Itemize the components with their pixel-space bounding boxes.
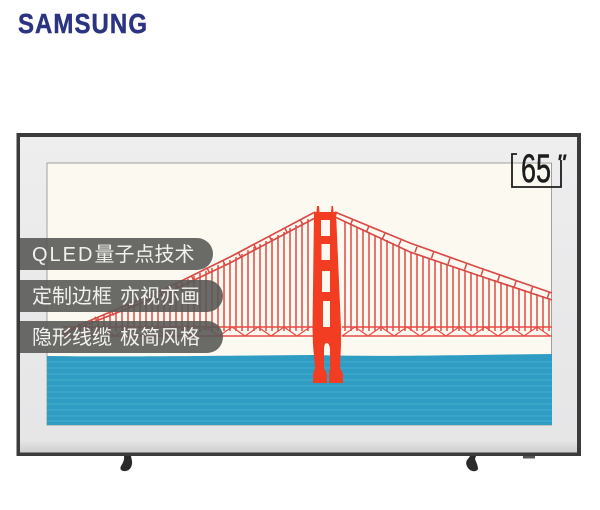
feature pills [20,238,223,353]
icon: right stand foot [466,456,478,471]
artwork: golden gate bridge [47,163,552,425]
bridge tower [312,206,343,383]
badge: 65 inch [512,147,567,191]
tv frame [16,133,581,456]
pill: QLED: QLED量子点技术 [32,243,194,266]
main cables right [335,212,552,300]
pill: custom frame [20,280,223,312]
size number: 65 [521,147,551,191]
white mat [20,137,577,452]
pill: invisible cable: 隐形线缆 极简风格 [32,326,200,349]
main cables left [63,212,315,334]
bracket [512,154,561,187]
inch mark: " [556,150,567,175]
logo: SAMSUNG: SAMSUNG [18,10,147,39]
television [16,133,581,471]
pill: custom frame: 定制边框 亦视亦画 [32,285,200,308]
road deck [63,327,552,336]
deck truss [63,327,550,336]
cable struts [63,214,552,333]
water [47,354,552,425]
pill: invisible cable [20,321,223,353]
art background [47,163,552,425]
pill: QLED [20,238,213,270]
bridge structure [63,212,552,336]
icon: left stand foot [120,456,132,471]
icon: remote sensor bump [523,456,535,458]
hangers [68,219,549,331]
